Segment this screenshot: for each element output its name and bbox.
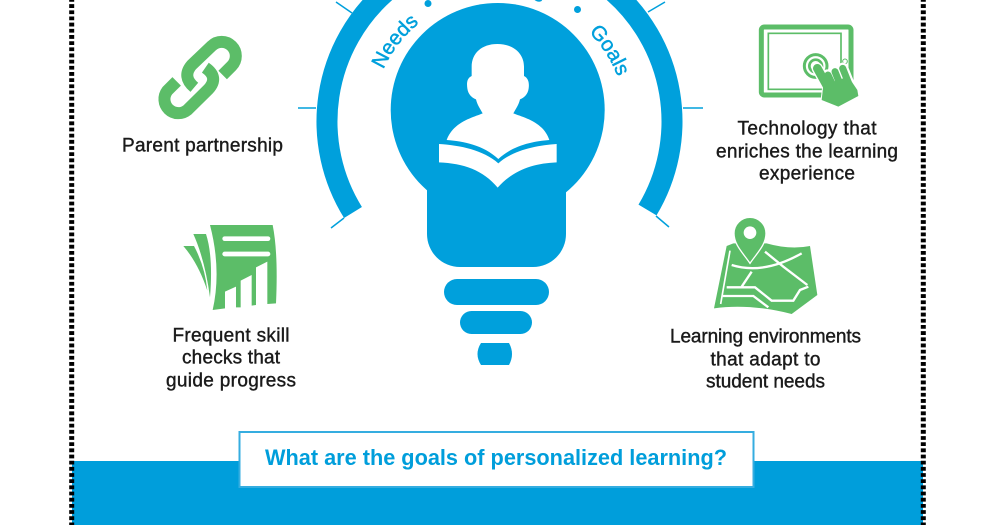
bottom blue band — [72, 461, 923, 525]
light bulb — [391, 3, 605, 365]
reader icon — [439, 44, 557, 188]
icon: skill check report — [183, 225, 277, 310]
dotted border left — [69, 0, 74, 525]
label: learning environments: Learning environments — [670, 326, 861, 348]
label: technology — [716, 118, 898, 184]
label: skill checks: guide progress — [166, 370, 296, 392]
radial arc with ticks — [298, 0, 703, 228]
label: technology: enriches the learning — [716, 142, 898, 162]
label: technology: experience — [759, 164, 855, 184]
question box — [240, 432, 754, 487]
icon: chain link — [164, 42, 236, 113]
label: skill checks: checks that — [182, 348, 281, 368]
icon: map with pin — [714, 217, 817, 314]
label: technology: Technology that — [738, 118, 877, 140]
curved words around bulb — [371, 0, 627, 76]
curved words around bulb: Needs — [371, 16, 418, 68]
question heading: What are the goals of personalized learning? — [265, 445, 727, 470]
icon: tablet with touching hand — [761, 27, 858, 107]
label: learning environments — [670, 326, 861, 392]
curved words around bulb: Goals — [592, 26, 627, 76]
label: learning environments: student needs — [706, 372, 825, 392]
label: skill checks — [166, 326, 296, 392]
label: parent partnership: Parent partnership — [122, 136, 283, 156]
label: learning environments: that adapt to — [710, 350, 820, 370]
dotted border right — [921, 0, 926, 525]
label: skill checks: Frequent skill — [172, 326, 290, 346]
